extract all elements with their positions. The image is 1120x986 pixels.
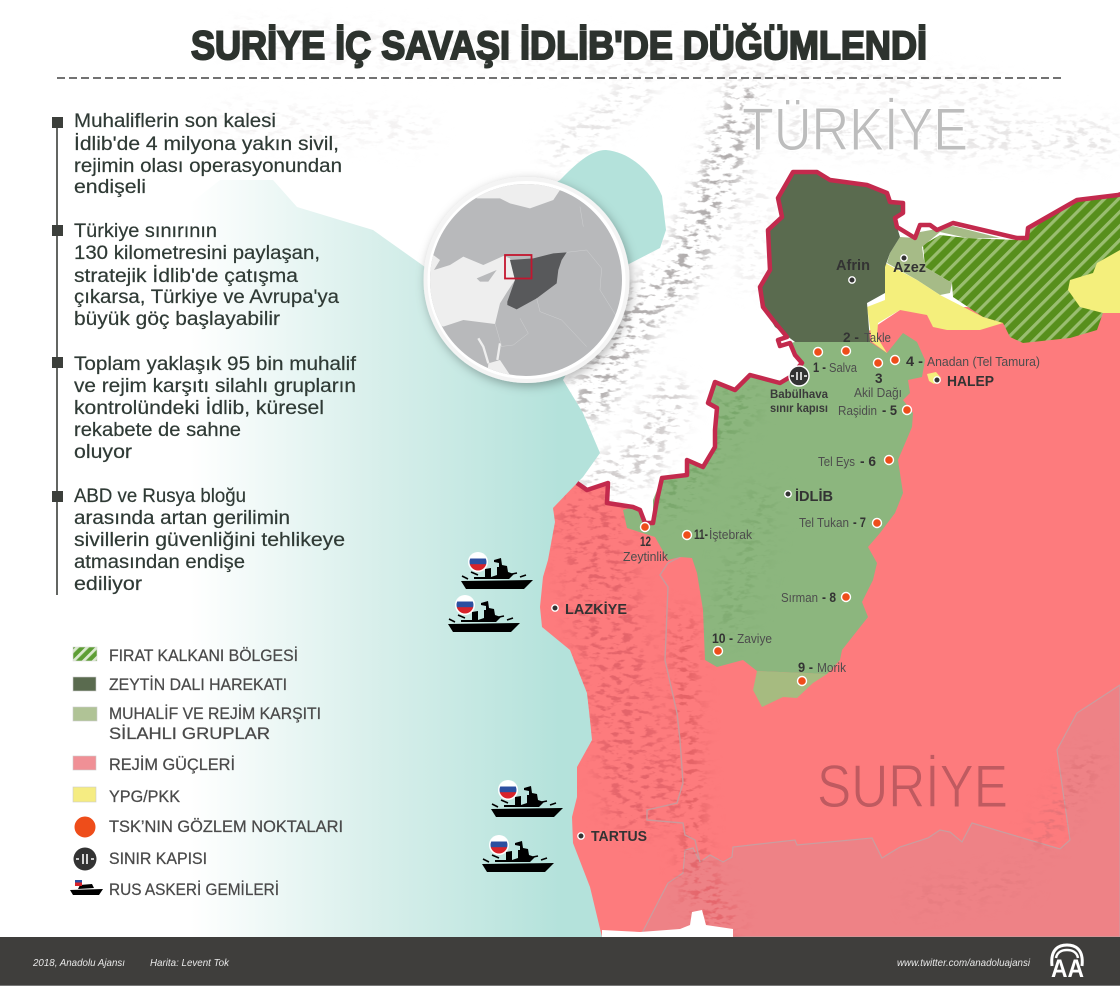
border gate: Babülhava: sınır kapısı [770,401,828,415]
legend: TSK posts: TSK’NIN GÖZLEM NOKTALARI [109,818,343,836]
ship 2 [448,595,520,632]
post 3 Akil Dağı: Akil Dağı [854,385,902,400]
footer bar [0,937,1120,986]
bullet 3: kontrolündeki İdlib, küresel [74,398,324,419]
footer map credit: Harita: Levent Tok [150,957,230,969]
post 8 Sırman: - 8 [822,590,836,605]
post 12 Zeytinlik: Zeytinlik [623,549,668,564]
legend: Muhalif: MUHALİF VE REJİM KARŞITI [109,704,321,723]
bullet 3: oluyor [74,442,133,463]
bullet 2: büyük göç başlayabilir [74,309,281,330]
post 4 Anadan: 4 - [906,354,923,369]
region: regime forces [540,300,1120,937]
sea [0,150,666,937]
map label: SURİYE: SURİYE [817,753,1008,820]
region: southern opposition pocket (Morik) [753,671,827,707]
region: İdlib opposition area [623,333,925,674]
relief on regime area [590,520,1090,920]
post 4 Anadan: Anadan (Tel Tamura) [927,354,1040,369]
post 3 Akil Dağı [854,358,902,400]
bullet 4 [52,486,345,595]
bullet 4: ABD ve Rusya bloğu [74,486,246,507]
post 7 Tel Tukan: Tel Tukan [799,515,849,530]
bullet 3: ve rejim karşıtı silahlı grupların [74,376,356,397]
post 1 Salva [813,348,858,375]
bullet 2: çıkarsa, Türkiye ve Avrupa'ya [74,287,339,308]
bullet 2: 130 kilometresini paylaşan, [74,243,320,264]
bullet 3: rekabete de sahne [74,420,241,441]
legend: Zeytin Dalı: ZEYTİN DALI HAREKATI [109,675,287,694]
locator red box [505,255,532,278]
post 5 Raşidin: Raşidin [838,403,877,418]
bullet 3 [52,354,357,463]
city: İdlib: İDLİB [795,488,833,505]
bullet 4: ediliyor [74,574,143,595]
locator globe [420,177,630,383]
post 6 Tel Eys: Tel Eys [818,454,855,469]
region: Azez opposition area [887,226,1000,295]
city: Halep: HALEP [947,373,994,390]
bullet 1 [52,111,342,198]
legend: border gate [74,848,207,870]
legend: Muhalif [73,704,321,743]
post 9 Morik [798,660,846,686]
city: Lazkiye: LAZKİYE [565,601,627,618]
Turkish border line [577,172,1120,523]
bullet 1: Muhaliflerin son kalesi [74,111,276,132]
map label: TÜRKİYE: TÜRKİYE [742,96,968,163]
post 6 Tel Eys: - 6 [860,454,876,469]
legend: Fırat Kalkanı: FIRAT KALKANI BÖLGESİ [109,646,298,665]
bullet 2: stratejik İdlib'de çatışma [74,266,298,287]
post 9 Morik: 9 - [798,660,813,675]
post 8 Sırman: Sırman [781,590,818,605]
post 6 Tel Eys [818,454,894,469]
thin border lines [647,535,700,862]
ship 1 [461,552,533,589]
bullet 4: atmasından endişe [74,552,245,573]
bullet 1: endişeli [74,177,146,198]
ship 3 [491,780,563,817]
city: Afrin [836,257,870,283]
footer credit: 2018, Anadolu Ajansı [32,957,125,969]
post 11 İştebrak: İştebrak [709,527,752,542]
bullet 2 [52,221,339,330]
city: Azez: Azez [893,259,926,276]
land relief texture [230,40,1100,480]
region: darker southern zone [640,685,1120,937]
relief on İdlib [670,400,760,620]
post 11 İştebrak [682,527,752,542]
city: Tartus: TARTUS [591,828,647,845]
city: Afrin: Afrin [836,257,870,274]
white coastal strip at bottom [602,910,733,937]
AA logo: AA [1051,955,1084,983]
region: Halep yellow patch [927,372,941,384]
footer url: www.twitter.com/anadoluajansi [897,957,1031,969]
post 8 Sırman [781,590,850,605]
text column with bullets [52,111,357,595]
bullet 2: Türkiye sınırının [74,221,217,242]
post 12 Zeytinlik: 12 [640,534,651,549]
post 9 Morik: Morik [817,660,846,675]
post 12 Zeytinlik [623,522,668,564]
legend: Muhalif: SİLAHLI GRUPLAR [109,724,270,743]
dashed divider [57,77,1064,79]
post 7 Tel Tukan: - 7 [853,515,866,530]
bullet 3: Toplam yaklaşık 95 bin muhalif [74,354,357,375]
region: YPG/PKK west [867,263,1003,353]
post 10 Zaviye [712,631,772,656]
post 10 Zaviye: 10 - [712,631,733,646]
border gate: Babülhava: Babülhava [770,387,828,401]
post 5 Raşidin: - 5 [882,403,897,418]
title: SURİYE İÇ SAVAŞI İDLİB'DE DÜĞÜMLENDİ [191,22,927,68]
bullet 1: İdlib'de 4 milyona yakın sivil, [74,134,339,155]
legend: YPG/PKK [73,787,180,806]
post 7 Tel Tukan [799,515,882,530]
post 2 Takle [842,330,891,356]
bullet 4: sivillerin güvenliğini tehlikeye [74,530,345,551]
post 1 Salva: Salva [829,360,858,375]
post 10 Zaviye: Zaviye [737,631,772,646]
bullet 4: arasında artan gerilimin [74,508,290,529]
border gate: Babülhava [770,366,828,415]
post 1 Salva: 1 - [813,360,826,375]
ship 4 [482,835,554,872]
legend: ships: RUS ASKERİ GEMİLERİ [109,880,279,899]
AA logo [1051,945,1084,983]
post 2 Takle: Takle [864,330,891,345]
post 11 İştebrak: 11- [694,527,708,542]
region: Fırat Kalkanı hatch [923,195,1120,343]
legend: border gate: SINIR KAPISI [109,850,207,868]
post 5 Raşidin [838,403,912,418]
region: Afrin (Zeytin Dalı) [760,172,903,342]
legend: YPG/PKK: YPG/PKK [109,788,180,806]
legend [70,646,343,899]
bullet 1: rejimin olası operasyonundan [74,156,342,177]
region: YPG/PKK east [1068,250,1120,313]
post 2 Takle: 2 - [843,330,859,345]
post 3 Akil Dağı: 3 [875,371,883,386]
legend: Rejim: REJİM GÜÇLERİ [109,755,235,774]
